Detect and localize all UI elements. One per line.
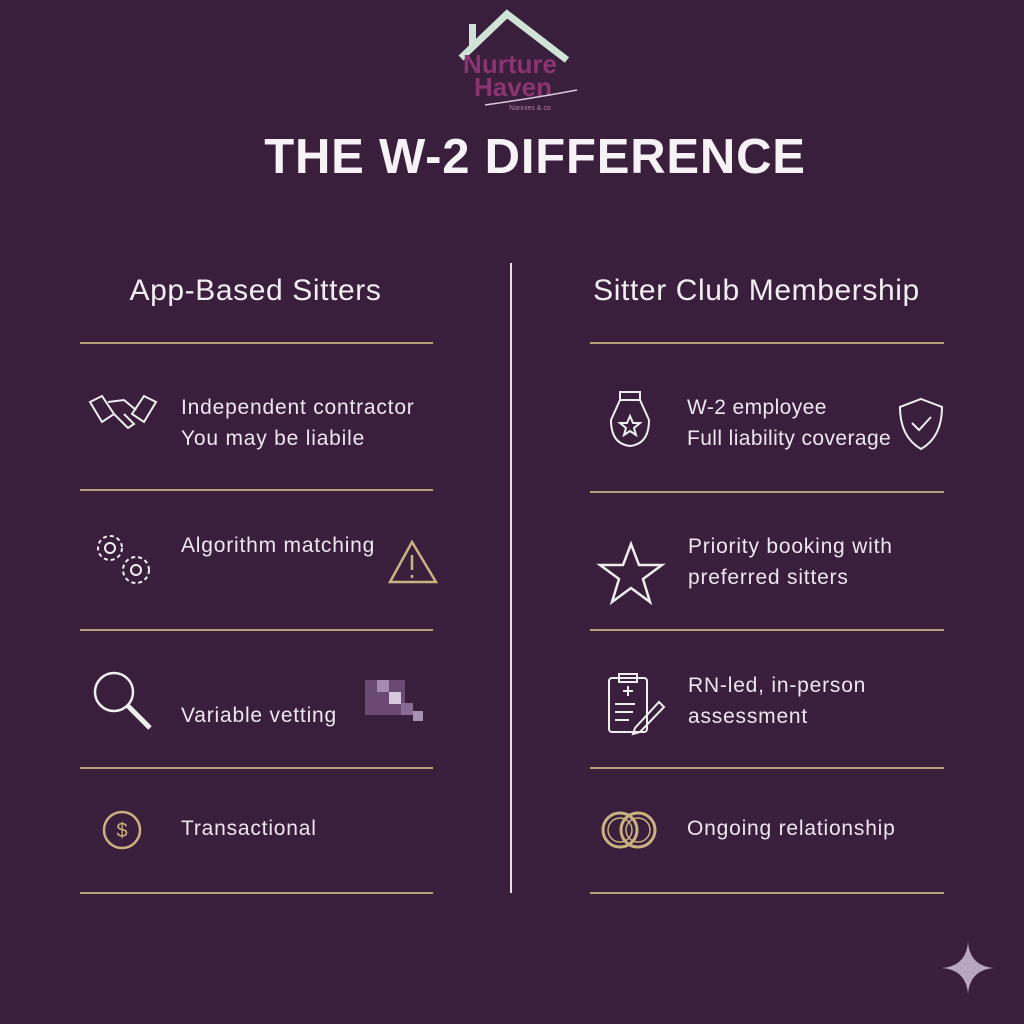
text row 2: Priority booking with xyxy=(688,535,893,558)
panel: app-based xyxy=(80,274,438,894)
icon: coin: $ xyxy=(116,820,128,842)
text row 2 xyxy=(688,535,893,589)
text row 3: assessment xyxy=(688,705,808,728)
logo: Nurture xyxy=(463,49,557,79)
icon: pixelated xyxy=(365,680,423,721)
icon: star xyxy=(596,540,666,606)
icon: badge xyxy=(610,391,650,447)
icon: handshake xyxy=(88,394,158,430)
icon: shield xyxy=(899,398,943,450)
text row 2: preferred sitters xyxy=(688,566,849,589)
text row 4: Transactional xyxy=(181,817,317,840)
text row 3 xyxy=(688,674,866,728)
logo xyxy=(458,9,578,112)
title: THE W-2 DIFFERENCE xyxy=(264,130,806,184)
text row 3: Variable vetting xyxy=(181,704,337,727)
icon: clipboard xyxy=(608,673,666,736)
icon: gears xyxy=(97,535,150,584)
icon: coin xyxy=(102,810,142,850)
icon: rings xyxy=(602,812,656,848)
text row 1: Full liability coverage xyxy=(687,427,891,450)
text row 1 xyxy=(687,396,891,450)
text row 3: RN-led, in-person xyxy=(688,674,866,697)
text row 1 xyxy=(181,396,415,450)
divider xyxy=(510,263,512,893)
panel: sitter club xyxy=(590,274,944,894)
text row 1: You may be liabile xyxy=(181,427,365,450)
logo: Haven xyxy=(474,72,552,102)
text row 1: W-2 employee xyxy=(687,396,827,419)
heading left: App-Based Sitters xyxy=(130,274,382,307)
text row 4: Ongoing relationship xyxy=(687,817,896,840)
icon: warning xyxy=(388,540,438,584)
text row 2: Algorithm matching xyxy=(181,534,375,557)
icon: magnifier xyxy=(94,672,152,730)
heading right: Sitter Club Membership xyxy=(593,274,920,307)
text row 1: Independent contractor xyxy=(181,396,415,419)
logo: Nannies & co xyxy=(509,105,551,112)
icon: sparkle xyxy=(942,942,994,994)
